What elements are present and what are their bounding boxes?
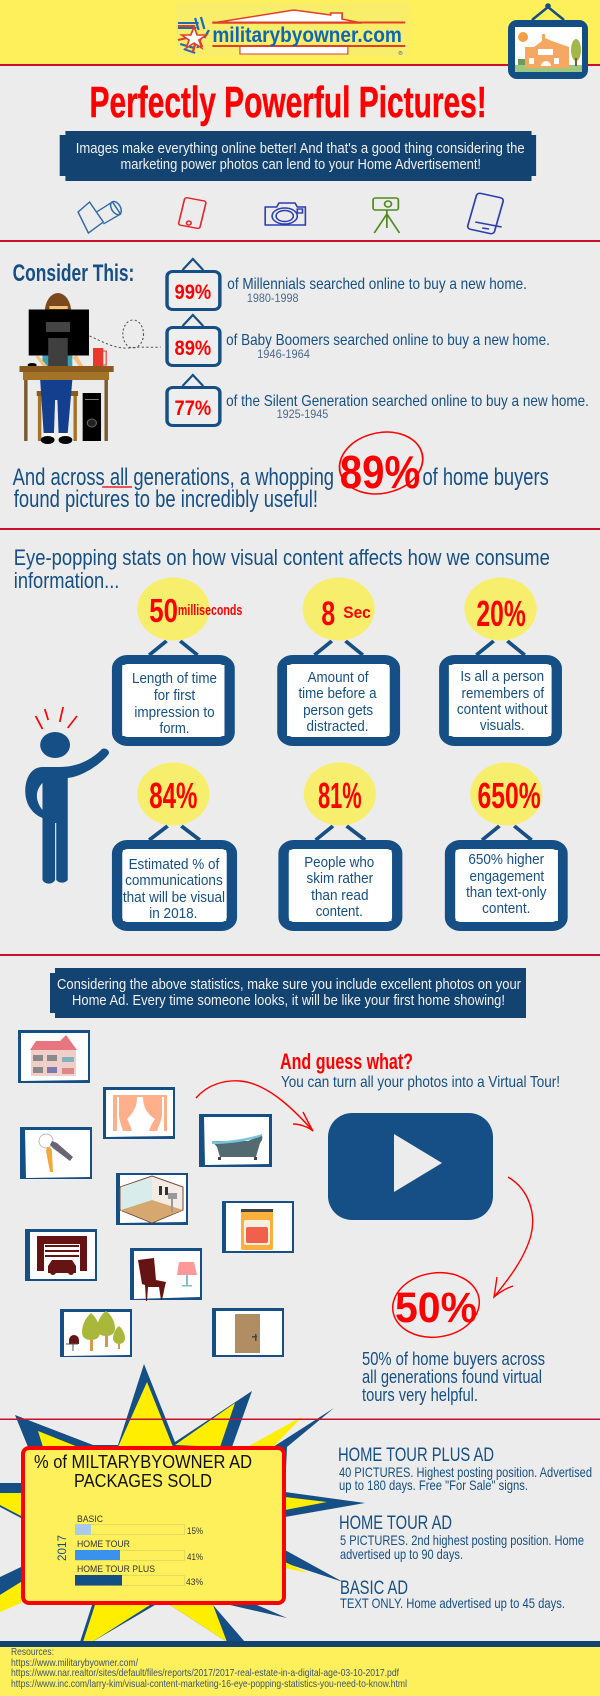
icon: surprised person bbox=[25, 707, 109, 884]
icon: framed house picture bbox=[508, 3, 588, 79]
section divider 2 bbox=[0, 528, 600, 530]
stat card: 81%: than read bbox=[311, 887, 369, 904]
stat card: 84%: 84% bbox=[149, 776, 197, 816]
illustration: person at desk bbox=[20, 293, 161, 444]
intro banner: marketing power photos can lend to your Home Advertisement! bbox=[121, 156, 481, 173]
stat card: 50 milliseconds: Length of time bbox=[132, 670, 217, 687]
stat card: 84%: communications bbox=[125, 872, 223, 889]
bar chart: BASIC bbox=[77, 1514, 103, 1524]
banner: considering the statistics bbox=[50, 968, 526, 1018]
icon: blue phone bbox=[467, 193, 504, 234]
stat card: 20%: Is all a person bbox=[460, 668, 544, 685]
stat card: 84% bbox=[117, 762, 232, 926]
stat card: 50 milliseconds: form. bbox=[160, 720, 189, 737]
bar chart: 2017 bbox=[55, 1535, 69, 1561]
stat card: 81% bbox=[284, 762, 397, 926]
bar chart: HOME TOUR bbox=[77, 1539, 130, 1549]
stat card: 50 milliseconds: impression to bbox=[134, 704, 215, 721]
arrow: photos to video bbox=[196, 1081, 313, 1131]
callout: 50%: 50% bbox=[395, 1284, 477, 1332]
photo: curtains bbox=[103, 1087, 175, 1139]
intro banner bbox=[60, 131, 536, 181]
text: and guess what bbox=[280, 1049, 560, 1091]
stat card: 50 milliseconds: 50 bbox=[149, 592, 178, 629]
stat card: 84%: in 2018. bbox=[149, 905, 197, 922]
text: 50% of home buyers bbox=[362, 1349, 545, 1405]
text: basic ad: BASIC AD bbox=[340, 1578, 408, 1599]
bar chart: 43% bbox=[186, 1577, 203, 1587]
section divider 4 bbox=[0, 1418, 600, 1420]
chart title: % of MILTARYBYOWNER AD bbox=[34, 1452, 252, 1472]
chart title: PACKAGES SOLD bbox=[74, 1471, 212, 1491]
callout: 89% of home buyers: And across all generations, a whopping bbox=[13, 465, 334, 491]
stat frame: 99% bbox=[167, 259, 220, 310]
icon: green tripod camera bbox=[373, 198, 400, 233]
stat card: 8 Sec: person gets bbox=[303, 702, 373, 719]
photo: trees and mailbox bbox=[60, 1309, 132, 1357]
text: home tour ad bbox=[339, 1513, 584, 1562]
text: basic ad bbox=[340, 1578, 565, 1611]
text: 50% of home buyers: 50% of home buyers across bbox=[362, 1349, 545, 1369]
banner: considering the statistics: Home Ad. Every time someone looks, it will be like your first home showing! bbox=[72, 993, 505, 1009]
stat card: 84%: that will be visual bbox=[123, 889, 225, 906]
text: baby boomers: 1946-1964 bbox=[257, 348, 310, 361]
stat frame: 77%: 77% bbox=[174, 396, 211, 420]
callout: 89% of home buyers: 89% bbox=[340, 447, 420, 498]
photo: oven bbox=[222, 1201, 294, 1253]
stat card: 20% bbox=[444, 578, 557, 742]
stat card: 650%: engagement bbox=[470, 868, 545, 885]
bar chart: HOME TOUR PLUS bbox=[77, 1564, 155, 1574]
heading: eye-popping stats bbox=[14, 546, 550, 594]
panel: ad packages chart bbox=[23, 1448, 284, 1603]
text: home tour plus ad: up to 180 days. Free "For Sale" signs. bbox=[339, 1477, 528, 1493]
text: 50% of home buyers: all generations found virtual bbox=[362, 1367, 542, 1387]
arrow: video to 50% bbox=[494, 1177, 533, 1297]
photo: bathtub bbox=[199, 1114, 272, 1167]
stat frame: 89%: 89% bbox=[174, 336, 211, 360]
stat card: 8 Sec: Sec bbox=[343, 602, 371, 622]
callout: 89% of home buyers bbox=[13, 422, 549, 513]
stat frame: 77% bbox=[167, 375, 220, 426]
stat card: 20%: visuals. bbox=[480, 717, 525, 734]
footer: resources: https://www.militarybyowner.com/ bbox=[11, 1657, 138, 1669]
text: silent generation: 1925-1945 bbox=[277, 408, 328, 421]
stat card: 8 Sec: distracted. bbox=[307, 718, 369, 735]
bar chart: 15% bbox=[187, 1526, 203, 1536]
heading: Consider This: Consider This: bbox=[13, 261, 134, 287]
text: millennials: 1980-1998 bbox=[247, 292, 299, 305]
stat card: 650% bbox=[450, 762, 563, 926]
stat card: 650%: content. bbox=[482, 900, 530, 917]
stat card: 81%: 81% bbox=[318, 776, 362, 816]
stat card: 650%: than text-only bbox=[466, 884, 547, 901]
stat card: 20%: 20% bbox=[476, 594, 526, 634]
text: silent generation bbox=[226, 391, 589, 421]
bar chart: 41% bbox=[187, 1552, 203, 1562]
photo: house bbox=[18, 1030, 90, 1083]
footer: resources: Resources: bbox=[11, 1646, 54, 1658]
section divider 1 bbox=[0, 240, 600, 242]
text: and guess what: And guess what? bbox=[280, 1049, 413, 1074]
heading: eye-popping stats: information... bbox=[14, 569, 119, 594]
callout: 89% of home buyers: found pictures to be incredibly useful! bbox=[14, 487, 318, 513]
icon: camera with lens bbox=[78, 200, 124, 233]
stat card: 81%: skim rather bbox=[307, 870, 374, 887]
stat card: 8 Sec bbox=[282, 578, 395, 742]
footer: resources bbox=[0, 1641, 600, 1696]
callout: 50% bbox=[388, 1267, 484, 1343]
text: 50% of home buyers: tours very helpful. bbox=[362, 1385, 478, 1405]
stat card: 8 Sec: time before a bbox=[298, 685, 377, 702]
stat card: 8 Sec: Amount of bbox=[308, 669, 369, 686]
starburst background bbox=[0, 1364, 365, 1642]
stat card: 650%: 650% higher bbox=[468, 851, 545, 868]
text: home tour plus ad bbox=[338, 1445, 592, 1493]
photo: room bbox=[116, 1173, 188, 1225]
stat card: 50 milliseconds bbox=[117, 578, 242, 742]
stat frame: 99%: 99% bbox=[174, 280, 211, 304]
stat card: 81%: content. bbox=[316, 903, 363, 920]
footer: resources: https://www.nar.realtor/sites/default/files/reports/2017/2017-real-estate-in-a-digital-age-03-10-2017.pdf bbox=[11, 1667, 399, 1679]
photo: keys bbox=[20, 1127, 92, 1179]
stat card: 50 milliseconds: milliseconds bbox=[178, 602, 242, 619]
stat frame: 89% bbox=[167, 315, 220, 366]
footer: resources: https://www.inc.com/larry-kim/visual-content-marketing-16-eye-popping-statistics-you-need-to-know.html bbox=[11, 1678, 407, 1690]
logo: militarybyowner.com bbox=[176, 3, 410, 57]
text: home tour plus ad: HOME TOUR PLUS AD bbox=[338, 1445, 494, 1466]
banner: considering the statistics: Considering the above statistics, make sure you include excellent photos on your bbox=[57, 977, 521, 993]
logo: militarybyowner.com: militarybyowner.com bbox=[212, 23, 402, 47]
stat card: 20%: remembers of bbox=[461, 685, 545, 702]
stat card: 650%: 650% bbox=[478, 776, 541, 816]
stat card: 8 Sec: 8 bbox=[321, 594, 335, 632]
text: home tour ad: HOME TOUR AD bbox=[339, 1513, 452, 1534]
header band bbox=[0, 0, 600, 66]
icon: blue camera bbox=[265, 203, 305, 225]
stat card: 20%: content without bbox=[457, 701, 548, 718]
icon: red tablet bbox=[178, 197, 206, 229]
photo: chair and lamp bbox=[130, 1248, 202, 1301]
photo: door bbox=[212, 1308, 284, 1357]
photo: garage bbox=[25, 1229, 97, 1281]
logo: militarybyowner.com: ® bbox=[398, 50, 403, 57]
text: millennials bbox=[227, 274, 527, 305]
text: home tour ad: advertised up to 90 days. bbox=[340, 1546, 463, 1562]
stat card: 84%: Estimated % of bbox=[129, 856, 220, 873]
text: baby boomers bbox=[226, 330, 550, 361]
section divider 3 bbox=[0, 954, 600, 956]
icon: video play button bbox=[328, 1113, 493, 1220]
stat card: 50 milliseconds: for first bbox=[154, 687, 196, 704]
stat card: 81%: People who bbox=[304, 854, 374, 871]
bar chart bbox=[55, 1514, 203, 1587]
